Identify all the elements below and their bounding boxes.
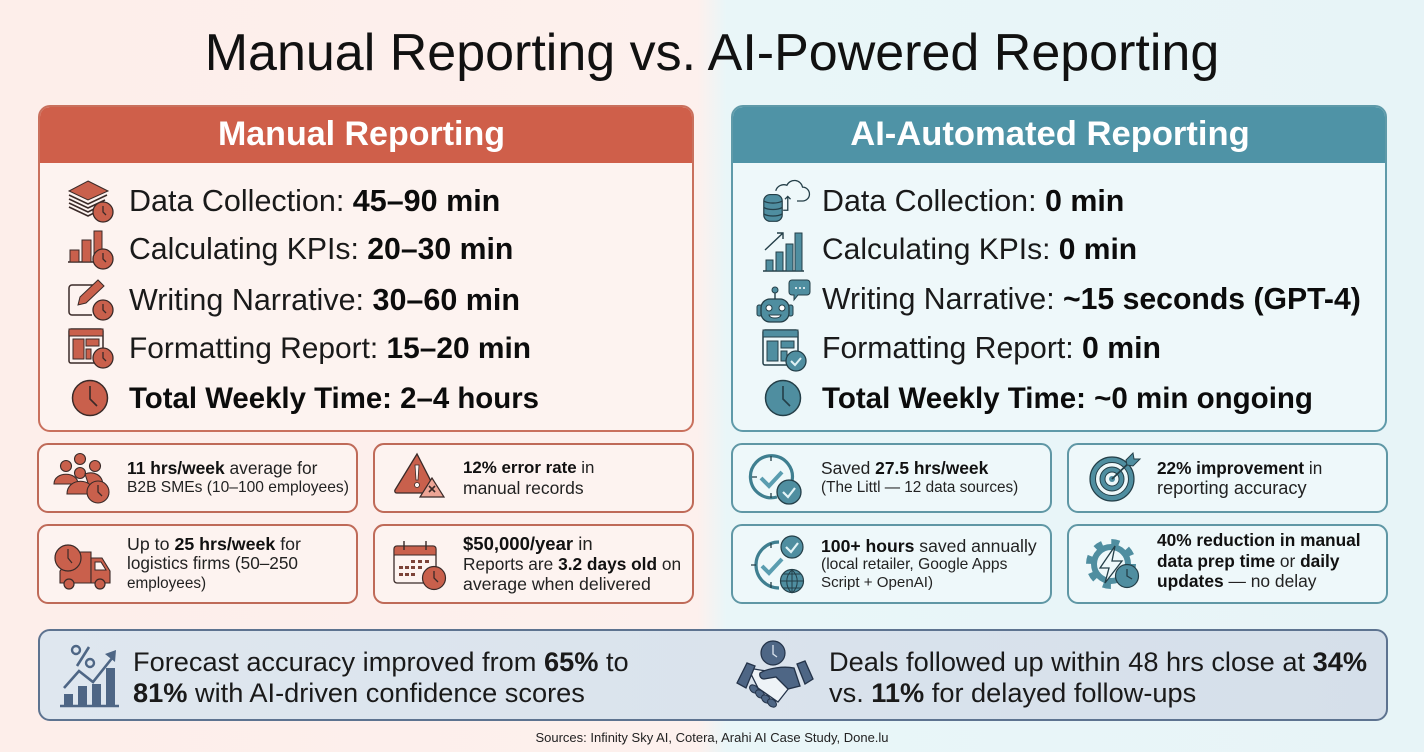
text: Script + OpenAI) (821, 574, 933, 591)
text: manual records (463, 478, 584, 498)
text: 100+ hours saved annually (821, 536, 1037, 556)
panel: manual reporting (38, 105, 694, 432)
row: data collection: Data Collection: 0 min (822, 184, 1124, 218)
row: writing narrative: Writing Narrative: ~15 seconds (GPT-4) (822, 283, 1361, 316)
icon: team with clock (53, 453, 110, 504)
card: $50,000/year (373, 524, 694, 604)
row: calculating KPIs: Calculating KPIs: 20–30 min (129, 233, 513, 266)
card: saved 27.5 hrs/week (731, 443, 1052, 513)
text: data prep time or daily (1157, 550, 1339, 570)
icon: bars with clock (68, 230, 114, 270)
icon: warning triangles (394, 452, 445, 498)
text (127, 458, 349, 496)
text (1157, 530, 1361, 591)
card: 12% error rate (373, 443, 694, 513)
panel: AI-automated reporting (731, 105, 1387, 432)
text: (local retailer, Google Apps (821, 556, 1007, 572)
text: forecast accuracy: Forecast accuracy improved from 65% to (133, 646, 629, 677)
row: total weekly time: Total Weekly Time: ~0 min ongoing (822, 382, 1313, 415)
row: data collection: Data Collection: 45–90 min (129, 184, 500, 218)
text: deal follow-ups: vs. 11% for delayed follow-ups (829, 677, 1196, 708)
icon: target with arrow (1089, 452, 1142, 502)
text: deal follow-ups: Deals followed up within 48 hrs close at 34% (829, 646, 1367, 677)
text (463, 458, 594, 498)
text: $50,000/year in (463, 532, 593, 554)
row: total weekly time: Total Weekly Time: 2–4 hours (129, 382, 539, 415)
text: Saved 27.5 hrs/week (821, 458, 988, 478)
row: formatting report: Formatting Report: 15–20 min (129, 332, 531, 365)
text: forecast accuracy: 81% with AI-driven confidence scores (133, 677, 585, 708)
text: deal follow-ups (829, 646, 1367, 708)
text: average when delivered (463, 574, 651, 594)
banner: outcomes (38, 629, 1388, 721)
text: updates — no delay (1157, 571, 1316, 591)
text: 11 hrs/week average for (127, 458, 317, 478)
text: 22% improvement in (1157, 458, 1322, 478)
icon: pencil with clock (68, 279, 114, 321)
title: Manual Reporting vs. AI-Powered Reporting (205, 24, 1219, 82)
heading: manual reporting: Manual Reporting (218, 115, 505, 153)
text: reporting accuracy (1157, 478, 1307, 498)
heading: AI-automated reporting: AI-Automated Reporting (850, 115, 1250, 153)
row: calculating KPIs: Calculating KPIs: 0 min (822, 233, 1137, 266)
text: (The Littl — 12 data sources) (821, 479, 1018, 496)
icon: stacked data with clock (68, 180, 114, 223)
icon: clock with check and globe (751, 535, 804, 594)
text (127, 534, 301, 592)
sources footnote: Sources: Infinity Sky AI, Cotera, Arahi AI Case Study, Done.lu (535, 730, 889, 745)
text (463, 532, 681, 594)
card: 40% reduction (1067, 524, 1388, 604)
row: formatting report: Formatting Report: 0 min (822, 332, 1161, 365)
icon: gear with lightning and clock (1086, 539, 1140, 589)
card: 11 hrs/week (37, 443, 358, 513)
text (821, 458, 1018, 496)
icon: layout with clock (68, 328, 114, 369)
icon: handshake with clock (736, 640, 814, 708)
icon: calendar with clock (393, 541, 446, 590)
text: 40% reduction in manual (1157, 530, 1361, 550)
icon: clock (72, 380, 108, 416)
icon: clock (764, 380, 802, 416)
heading: manual reporting (38, 105, 694, 163)
text: employees) (127, 574, 206, 592)
card: 22% improvement (1067, 443, 1388, 513)
card: 25 hrs/week (37, 524, 358, 604)
text (1157, 458, 1322, 498)
icon: database and cloud (763, 180, 810, 222)
text: forecast accuracy (133, 646, 629, 708)
icon: robot with speech bubble (756, 280, 810, 323)
icon: layout with check (762, 329, 807, 372)
icon: truck with clock (54, 544, 111, 590)
icon: clock with check (748, 454, 802, 505)
text: logistics firms (50–250 (127, 553, 298, 573)
row: writing narrative: Writing Narrative: 30–60 min (129, 283, 520, 317)
text (821, 536, 1037, 591)
icon: rising bars (763, 232, 804, 272)
text: Reports are 3.2 days old on (463, 554, 681, 574)
card: 100+ hours (731, 524, 1052, 604)
text: 12% error rate in (463, 458, 594, 477)
text: Up to 25 hrs/week for (127, 534, 301, 554)
icon: chart with percent (60, 644, 119, 708)
text: B2B SMEs (10–100 employees) (127, 479, 349, 496)
heading: AI-automated reporting (731, 105, 1387, 163)
